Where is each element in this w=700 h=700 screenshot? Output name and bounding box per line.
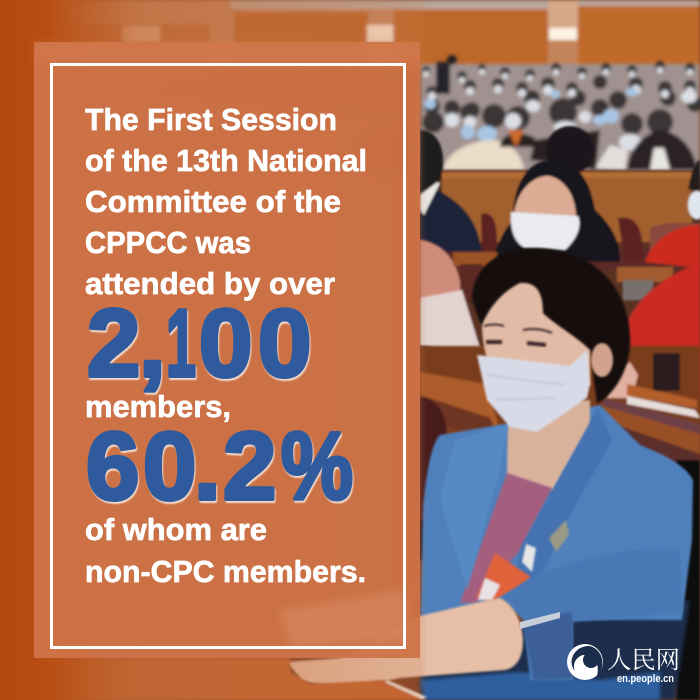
text: members,: members, bbox=[85, 389, 231, 424]
hair bbox=[472, 248, 630, 404]
eyes and brows bbox=[484, 324, 552, 345]
man in dark suit bbox=[420, 180, 482, 252]
closing text: non-CPC members. bbox=[85, 554, 366, 589]
headline text bbox=[85, 102, 367, 301]
neck bbox=[507, 400, 590, 490]
sleeve bbox=[500, 549, 682, 680]
big number: 60.2%: 60.2 bbox=[86, 413, 276, 520]
closing text: of whom are bbox=[85, 512, 267, 547]
big number: 2,100 bbox=[87, 290, 311, 397]
big number: 2,100: 2, bbox=[87, 290, 166, 397]
big number: 2,100: 00 bbox=[199, 290, 311, 397]
dark shadow under sleeve bbox=[420, 600, 690, 700]
hall wall with wood panels bbox=[0, 0, 700, 70]
front desk rows bbox=[420, 346, 700, 700]
white frame bbox=[52, 64, 404, 648]
front crowd bodies bbox=[443, 140, 524, 170]
face bbox=[482, 283, 590, 410]
desk foreground at bottom left bbox=[0, 658, 427, 700]
logo: People's Daily Online: en.people.cn bbox=[617, 673, 674, 685]
ghost figure within panel bbox=[34, 42, 420, 648]
cuff trim bbox=[520, 612, 560, 629]
woman at centre bbox=[546, 126, 594, 174]
face mask bbox=[477, 350, 590, 432]
translucent orange panel bbox=[34, 42, 420, 658]
paper bbox=[420, 290, 482, 355]
headline text: of the 13th National bbox=[85, 143, 367, 178]
logo: People's Daily Online bbox=[567, 640, 680, 685]
closing text bbox=[85, 512, 366, 589]
headline text: attended by over bbox=[85, 266, 335, 301]
big number: 60.2%: % bbox=[281, 413, 353, 520]
main delegate in blue jacket bbox=[287, 248, 693, 700]
distant crowd bbox=[420, 55, 700, 174]
logo: People's Daily Online: 人民网 bbox=[607, 640, 680, 675]
red jacket delegate at right bbox=[628, 263, 700, 395]
icon: crescent swirl bbox=[567, 644, 603, 680]
ear bbox=[591, 343, 613, 377]
headline text: CPPCC was bbox=[85, 225, 251, 260]
big number: 2,100: 1 bbox=[166, 290, 196, 397]
blue jacket bbox=[420, 405, 693, 640]
delegate badge bbox=[476, 544, 536, 603]
bare forearm and hand bbox=[287, 598, 523, 685]
brooch bbox=[549, 520, 569, 552]
middle row: desks and delegates bbox=[420, 126, 700, 355]
pink blouse bbox=[460, 473, 552, 603]
lower jacket bbox=[420, 672, 660, 700]
right lapel bbox=[510, 408, 612, 600]
pink jacket at left bbox=[420, 240, 462, 303]
headline text: The First Session bbox=[85, 102, 337, 137]
red jacket at right edge bbox=[645, 225, 700, 268]
cuff bbox=[523, 612, 573, 680]
left lapel bbox=[440, 425, 508, 590]
headline text: Committee of the bbox=[85, 184, 341, 219]
